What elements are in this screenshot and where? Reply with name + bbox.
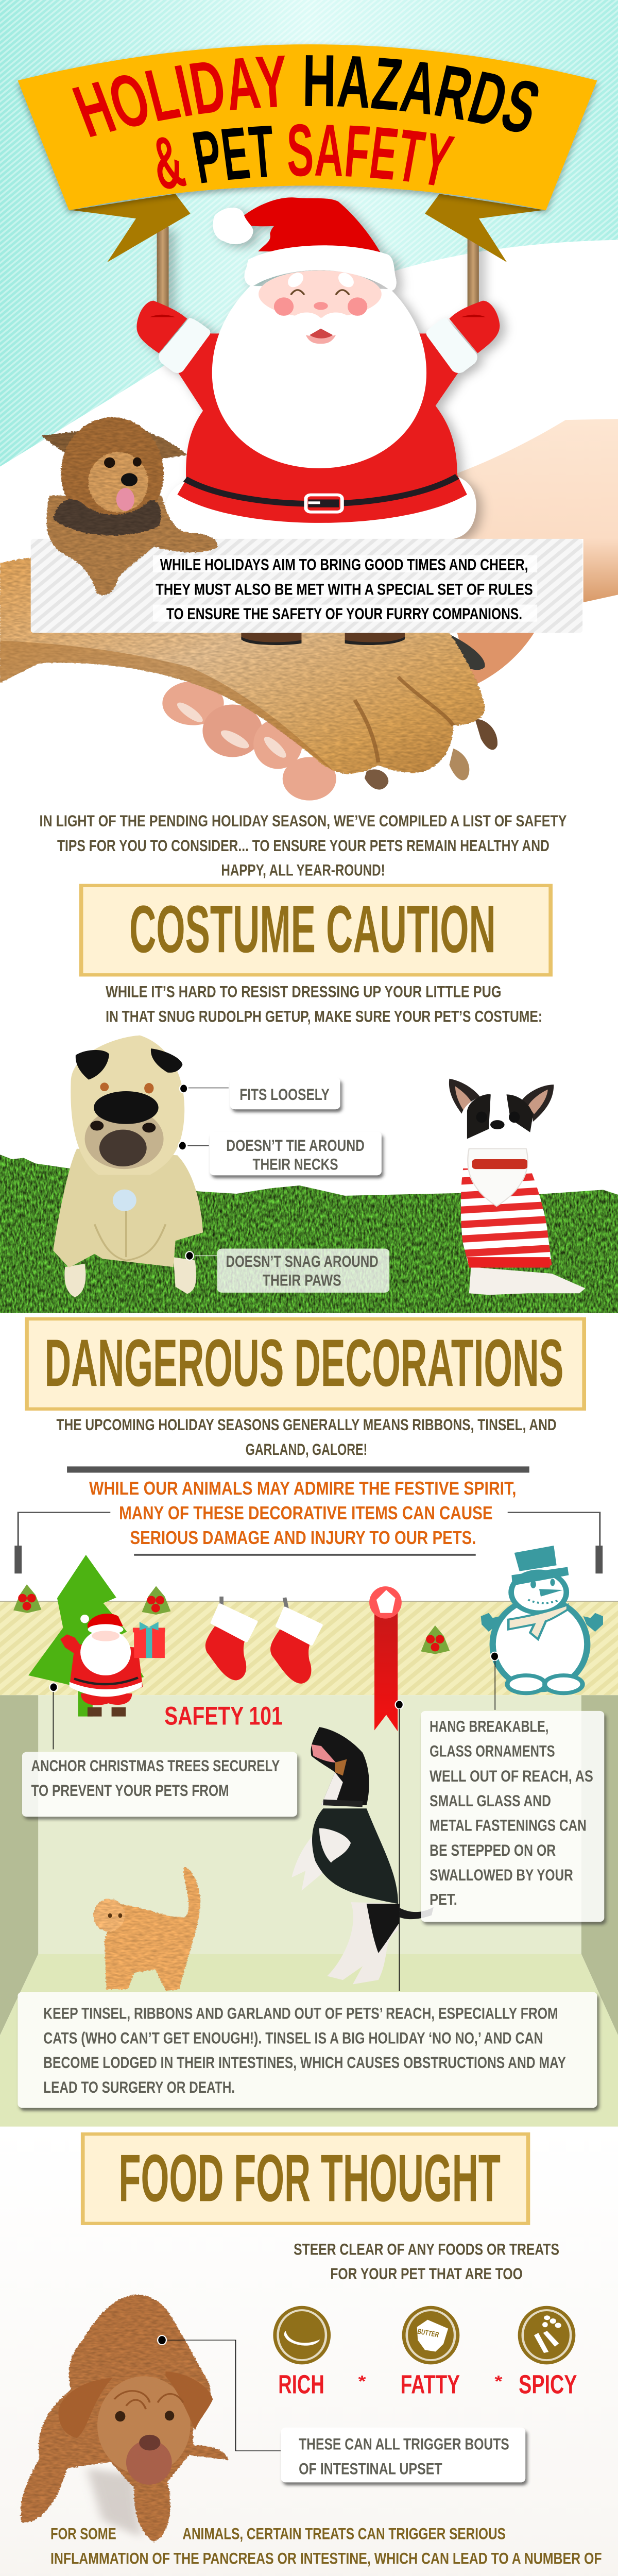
holly icon middle xyxy=(142,1586,170,1615)
chihuahua in striped sweater xyxy=(449,1079,585,1295)
heading: food for thought xyxy=(83,2134,528,2224)
callout: anchor trees: TO PREVENT YOUR PETS FROM xyxy=(31,1782,229,1800)
pom pom xyxy=(213,208,253,244)
orange warning text xyxy=(89,1479,517,1548)
left mitten and cuff xyxy=(136,301,210,373)
holly icon right xyxy=(421,1625,450,1654)
teal striped sky xyxy=(0,0,618,467)
right pole xyxy=(468,238,479,316)
banner right fold xyxy=(425,194,546,262)
snowman xyxy=(481,1546,603,1693)
lower beige background xyxy=(0,2128,618,2576)
callout: necks xyxy=(179,1131,382,1175)
christmas tree xyxy=(28,1555,144,1717)
icon: spicy xyxy=(518,2306,575,2364)
ribbon ornament xyxy=(369,1586,403,1731)
sad brown dog xyxy=(21,2295,229,2542)
leader lines xyxy=(53,1660,495,1991)
face xyxy=(259,270,382,344)
callout: anchor trees: ANCHOR CHRISTMAS TREES SECURELY xyxy=(31,1757,280,1775)
callout: glass ornaments: SMALL GLASS AND xyxy=(430,1792,551,1810)
decorations intro text: GARLAND, GALORE! xyxy=(246,1440,367,1459)
santa illustration xyxy=(136,197,500,539)
food intro text xyxy=(294,2240,559,2283)
belt buckle xyxy=(306,495,342,512)
title line one: HOLIDAY HAZARDS xyxy=(72,55,539,137)
labels: rich fatty spicy: SPICY xyxy=(519,2369,577,2399)
banner body xyxy=(18,44,597,210)
food section xyxy=(21,2134,602,2576)
hat xyxy=(237,197,381,252)
hand under the paw xyxy=(162,633,534,801)
frame xyxy=(14,1546,603,1573)
costume section xyxy=(0,1036,618,1556)
heading: costume caution xyxy=(81,886,551,975)
intro paragraph xyxy=(40,812,567,879)
callout: tinsel: LEAD TO SURGERY OR DEATH. xyxy=(43,2078,235,2096)
striped intro panel xyxy=(31,539,582,633)
beard xyxy=(212,286,426,468)
intro paragraph: HAPPY, ALL YEAR-ROUND! xyxy=(221,861,385,879)
callout: necks: DOESN’T TIE AROUND xyxy=(226,1137,365,1155)
callout: glass ornaments: HANG BREAKABLE, xyxy=(430,1718,548,1736)
decorations intro text xyxy=(56,1416,557,1459)
stockings xyxy=(205,1597,321,1684)
orange cat xyxy=(93,1867,200,1991)
labels: rich fatty spicy xyxy=(278,2369,577,2399)
belt xyxy=(185,477,457,504)
labels: rich fatty spicy: RICH xyxy=(278,2369,324,2399)
dog paw xyxy=(0,545,497,790)
callout: fits loosely xyxy=(180,1077,340,1109)
right mitten and cuff xyxy=(426,301,500,373)
callout: intestinal upset xyxy=(281,2428,525,2482)
icon: fatty butter xyxy=(402,2306,459,2364)
callout: paws xyxy=(185,1248,389,1293)
callout: glass ornaments xyxy=(421,1711,604,1922)
room walls and floor xyxy=(0,1695,618,2127)
safety 101 title: SAFETY 101 xyxy=(164,1701,283,1730)
banner left fold xyxy=(69,194,191,262)
callout: fits loosely: FITS LOOSELY xyxy=(239,1086,330,1104)
jumping dog xyxy=(291,1727,434,1984)
callout: tinsel xyxy=(18,1992,597,2108)
labels: rich fatty spicy: * xyxy=(494,2372,503,2391)
top-left fluffy dog xyxy=(41,417,217,595)
santa boots xyxy=(241,633,405,645)
callout: intestinal upset: OF INTESTINAL UPSET xyxy=(299,2460,442,2478)
human arm xyxy=(449,419,618,602)
grass field xyxy=(0,1155,618,1313)
callout: glass ornaments: PET. xyxy=(430,1891,457,1909)
callout: anchor trees xyxy=(22,1752,297,1817)
hat brim xyxy=(244,245,397,291)
labels: rich fatty spicy: * xyxy=(358,2372,366,2391)
callout: necks: THEIR NECKS xyxy=(253,1155,338,1174)
dog face details xyxy=(104,457,142,511)
callout: paws: THEIR PAWS xyxy=(263,1272,341,1290)
callout: paws: DOESN’T SNAG AROUND xyxy=(226,1252,379,1270)
holly icon left xyxy=(13,1584,41,1613)
icon: rich chili xyxy=(273,2306,331,2364)
intro section xyxy=(31,417,582,1026)
small santa xyxy=(60,1614,143,1717)
wallpaper band xyxy=(0,1601,618,1695)
gift xyxy=(133,1622,165,1658)
food warning paragraph xyxy=(50,2525,602,2576)
title line two: & PET SAFETY xyxy=(157,124,455,189)
costume intro text xyxy=(106,983,542,1026)
callout: intestinal upset: THESE CAN ALL TRIGGER BOUTS xyxy=(299,2435,509,2453)
leg shadow xyxy=(87,2468,142,2537)
safety 101 room section xyxy=(0,1546,618,2127)
icon: fatty butter: BUTTER xyxy=(417,2328,440,2339)
pug in costume xyxy=(53,1036,203,1297)
title banner xyxy=(14,43,600,262)
hero section xyxy=(0,0,618,801)
body xyxy=(164,477,476,539)
labels: rich fatty spicy: FATTY xyxy=(401,2369,460,2399)
left pole xyxy=(157,227,169,316)
food warning paragraph: FOR SOME xyxy=(50,2525,116,2543)
